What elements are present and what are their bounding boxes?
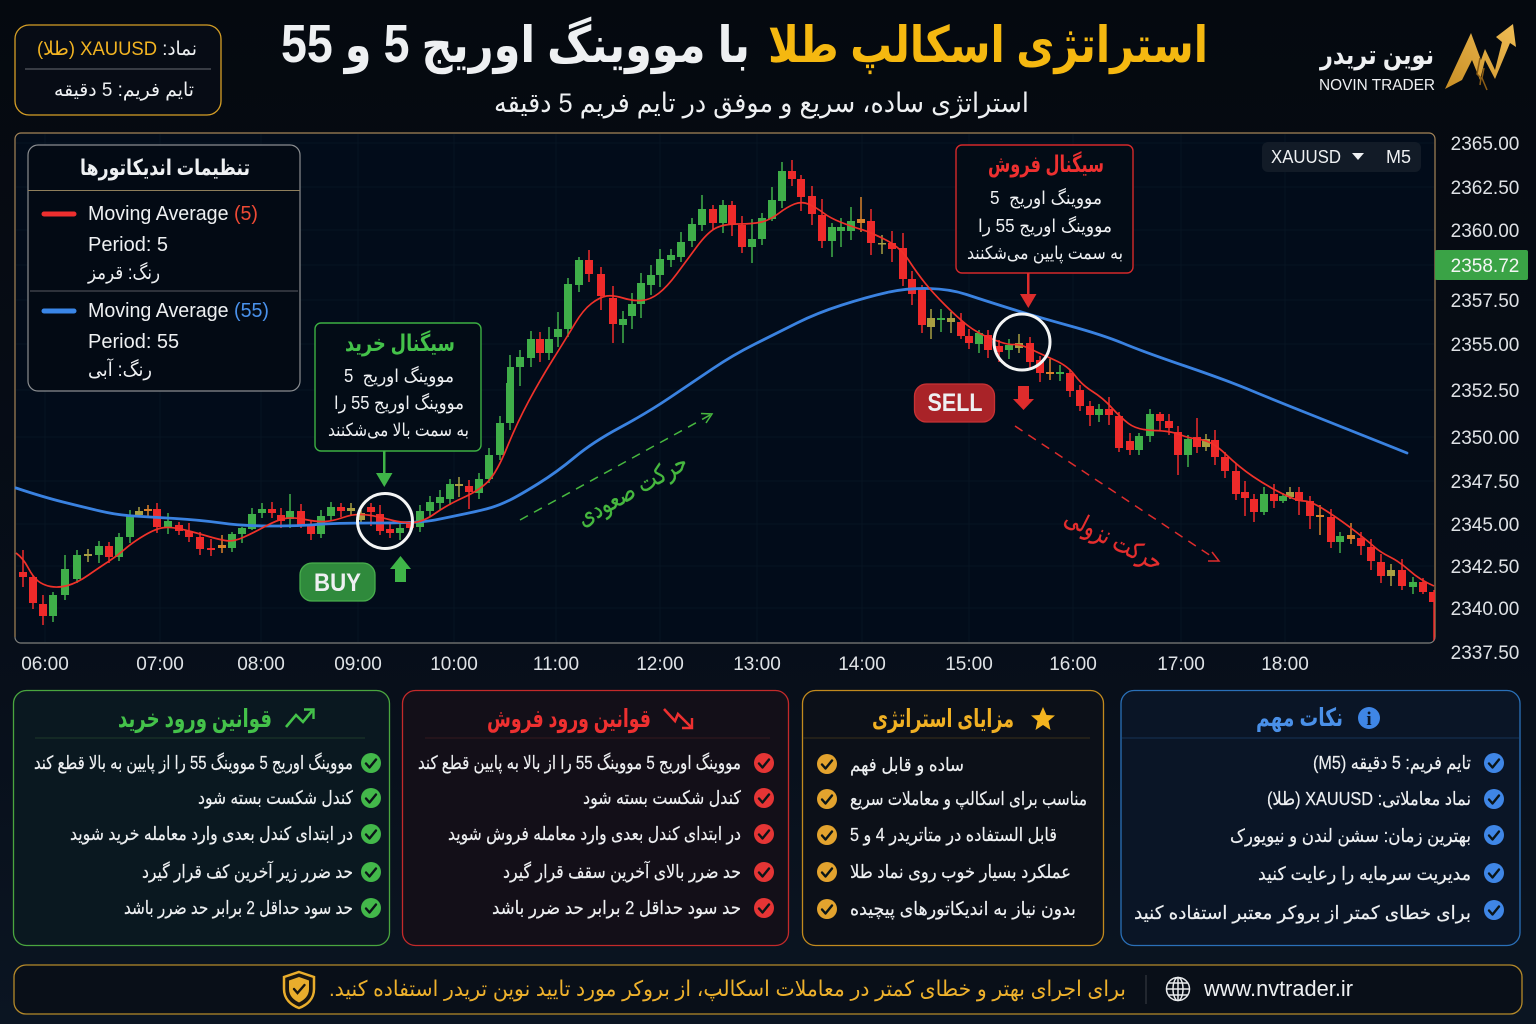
time axis: 16:00 bbox=[1049, 654, 1097, 675]
moving average 55 line bbox=[16, 288, 1407, 526]
icon: info bbox=[1358, 707, 1380, 730]
chart symbol selector bbox=[1262, 142, 1421, 172]
sell rule list: کندل شکست بسته شود bbox=[583, 787, 741, 809]
advantages list bbox=[817, 754, 1087, 920]
logo: Novin Trader: NOVIN TRADER bbox=[1319, 77, 1435, 94]
callout: sell signal: مووینگ اوریج 55 را bbox=[978, 215, 1112, 237]
callout: sell signal bbox=[956, 145, 1133, 273]
advantages list: مناسب برای اسکالپ و معاملات سریع bbox=[850, 788, 1087, 810]
icon: globe bbox=[1166, 978, 1190, 1000]
logo: Novin Trader: نوین تریدر bbox=[1318, 40, 1434, 71]
price axis: 2352.50 bbox=[1451, 381, 1519, 402]
legend: moving average 55: Moving Average (55) bbox=[88, 300, 269, 322]
crossover circle: sell bbox=[994, 314, 1050, 370]
sell rule list: مووینگ اوریج 5 مووینگ 55 را از بالا به پایین قطع کند bbox=[418, 752, 741, 774]
badge: BUY bbox=[300, 563, 375, 601]
callout: sell signal: سیگنال فروش bbox=[988, 151, 1104, 178]
time axis: 06:00 bbox=[21, 654, 69, 675]
legend: moving average 55: رنگ: آبی bbox=[88, 357, 152, 381]
symbol info box: نماد: XAUUSD (طلا) bbox=[37, 39, 197, 60]
buy rule list bbox=[34, 752, 381, 919]
buy rule list: حد ضرر زیر آخرین کف قرار گیرد bbox=[142, 860, 353, 883]
buy rule list: مووینگ اوریج 5 مووینگ 55 را از پایین به بالا قطع کند bbox=[34, 752, 353, 774]
callout: buy signal bbox=[315, 323, 481, 451]
time axis: 09:00 bbox=[334, 654, 382, 675]
legend: moving average 5: رنگ: قرمز bbox=[87, 262, 160, 284]
badge: SELL: SELL bbox=[928, 389, 982, 417]
icon: shield bbox=[284, 972, 314, 1008]
website: www.nvtrader.ir bbox=[1203, 976, 1353, 1001]
green candles bbox=[49, 162, 1417, 622]
price axis: 2350.00 bbox=[1451, 428, 1519, 449]
candlesticks bbox=[19, 160, 1437, 642]
price axis: 2342.50 bbox=[1451, 557, 1519, 578]
sell rule list: در ابتدای کندل بعدی وارد معامله فروش شوید bbox=[448, 823, 741, 845]
panel: important notes bbox=[1121, 690, 1520, 946]
callout: sell signal: به سمت پایین می‌شکنند bbox=[967, 243, 1123, 264]
arrow: buy signal to crossover bbox=[376, 451, 392, 487]
buy rule list: کندل شکست بسته شود bbox=[198, 787, 353, 809]
callout: buy signal: سیگنال خرید bbox=[345, 330, 455, 357]
moving average 5 line bbox=[16, 203, 1434, 587]
subtitle: استراتژی ساده، سریع و موفق در تایم فریم 5 دقیقه bbox=[494, 88, 1029, 119]
title: با مووینگ اوریج 5 و 55 bbox=[281, 14, 750, 75]
price axis bbox=[1435, 134, 1528, 664]
price axis: 2365.00 bbox=[1451, 134, 1519, 155]
legend: moving average 5 bbox=[44, 203, 258, 284]
label: downward move: حرکت نزولی bbox=[1060, 503, 1167, 577]
symbol info box bbox=[15, 25, 221, 115]
price axis: 2358.72 bbox=[1451, 256, 1519, 277]
legend: moving average 55 bbox=[44, 300, 269, 381]
icon: star bbox=[1031, 707, 1055, 730]
legend: moving average 5: Moving Average (5) bbox=[88, 203, 258, 225]
legend: moving average 55: Period: 55 bbox=[88, 331, 179, 353]
title: استراتژی اسکالپ طلا bbox=[768, 17, 1208, 75]
notes list bbox=[1134, 752, 1504, 924]
heading: sell rules: قوانین ورود فروش bbox=[487, 705, 651, 734]
price axis: 2355.00 bbox=[1451, 335, 1519, 356]
panel: price chart bbox=[15, 133, 1437, 643]
time axis: 18:00 bbox=[1261, 654, 1309, 675]
time axis: 10:00 bbox=[430, 654, 478, 675]
logo: Novin Trader bbox=[1318, 24, 1516, 94]
heading: notes: نکات مهم bbox=[1256, 704, 1343, 733]
time axis: 07:00 bbox=[136, 654, 184, 675]
arrow: buy up bbox=[390, 556, 411, 582]
icon: trend up bbox=[286, 710, 314, 727]
panel: buy entry rules bbox=[14, 690, 390, 946]
symbol info box: تایم فریم: 5 دقیقه bbox=[54, 80, 194, 101]
arrow: upward move bbox=[520, 414, 712, 520]
footer bar bbox=[14, 965, 1522, 1014]
arrow: sell down bbox=[1013, 386, 1034, 410]
sell rule list: حد سود حداقل 2 برابر حد ضرر باشد bbox=[492, 897, 741, 919]
price axis: 2340.00 bbox=[1451, 599, 1519, 620]
icon: info: i bbox=[1366, 709, 1372, 730]
advantages list: بدون نیاز به اندیکاتورهای پیچیده bbox=[850, 898, 1076, 920]
chart symbol selector: XAUUSD bbox=[1271, 146, 1341, 167]
price axis: 2337.50 bbox=[1451, 643, 1519, 664]
buy rule list: حد سود حداقل 2 برابر حد ضرر باشد bbox=[124, 897, 353, 919]
callout: buy signal: مووینگ اوریج 55 را bbox=[334, 392, 464, 414]
advantages list: عملکرد بسیار خوب روی نماد طلا bbox=[850, 861, 1071, 883]
price axis: 2360.00 bbox=[1451, 221, 1519, 242]
buy rule list: در ابتدای کندل بعدی وارد معامله خرید شوید bbox=[70, 823, 353, 845]
panel: strategy advantages bbox=[802, 690, 1104, 946]
callout: sell signal: مووینگ اوریج 5 bbox=[990, 187, 1102, 209]
price axis: 2347.50 bbox=[1451, 472, 1519, 493]
panel: indicator settings: تنظیمات اندیکاتورها bbox=[80, 155, 250, 181]
heading: advantages: مزایای استراتژی bbox=[872, 705, 1014, 734]
advantages list: ساده و قابل فهم bbox=[850, 754, 964, 776]
time axis: 15:00 bbox=[945, 654, 993, 675]
icon: trend down bbox=[664, 709, 692, 728]
price axis: 2362.50 bbox=[1451, 178, 1519, 199]
notes list: بهترین زمان: سشن لندن و نیویورک bbox=[1230, 825, 1471, 847]
chart symbol selector: M5 bbox=[1386, 146, 1411, 167]
callout: buy signal: مووینگ اوریج 5 bbox=[344, 365, 454, 387]
panel: indicator settings bbox=[28, 145, 300, 391]
title bbox=[281, 14, 1208, 75]
time axis: 13:00 bbox=[733, 654, 781, 675]
sell rule list bbox=[418, 752, 774, 919]
badge: BUY: BUY bbox=[314, 569, 361, 597]
footer message: برای اجرای بهتر و خطای کمتر در معاملات اسکالپ، از بروکر مورد تایید نوین تریدر استفاده کنید. bbox=[329, 977, 1126, 1001]
badge: SELL bbox=[914, 384, 994, 422]
arrow: sell signal to crossover bbox=[1020, 273, 1036, 308]
red candles bbox=[19, 160, 1437, 642]
doji candles bbox=[84, 197, 1395, 586]
time axis: 11:00 bbox=[533, 654, 579, 675]
legend: moving average 5: Period: 5 bbox=[88, 234, 168, 256]
time axis: 14:00 bbox=[838, 654, 886, 675]
callout: buy signal: به سمت بالا می‌شکنند bbox=[328, 420, 469, 440]
notes list: مدیریت سرمایه را رعایت کنید bbox=[1258, 863, 1471, 885]
time axis: 12:00 bbox=[636, 654, 684, 675]
crossover circle: buy bbox=[358, 494, 412, 548]
label: upward move: حرکت صعودی bbox=[572, 448, 692, 532]
notes list: نماد معاملاتی: XAUUSD (طلا) bbox=[1267, 788, 1471, 809]
arrow: downward move bbox=[1015, 426, 1219, 561]
heading: buy rules: قوانین ورود خرید bbox=[118, 705, 272, 734]
advantages list: قابل الستفاده در متاتریدر 4 و 5 bbox=[850, 824, 1057, 846]
time axis: 17:00 bbox=[1157, 654, 1205, 675]
price axis: 2357.50 bbox=[1451, 291, 1519, 312]
panel: sell entry rules bbox=[402, 690, 788, 946]
notes list: تایم فریم: 5 دقیقه (M5) bbox=[1313, 752, 1471, 774]
time axis: 08:00 bbox=[237, 654, 285, 675]
current price tag bbox=[1435, 250, 1528, 280]
time axis bbox=[21, 654, 1309, 675]
notes list: برای خطای کمتر از بروکر معتبر استفاده کنید bbox=[1134, 902, 1471, 924]
price axis: 2345.00 bbox=[1451, 515, 1519, 536]
sell rule list: حد ضرر بالای آخرین سقف قرار گیرد bbox=[503, 860, 741, 883]
